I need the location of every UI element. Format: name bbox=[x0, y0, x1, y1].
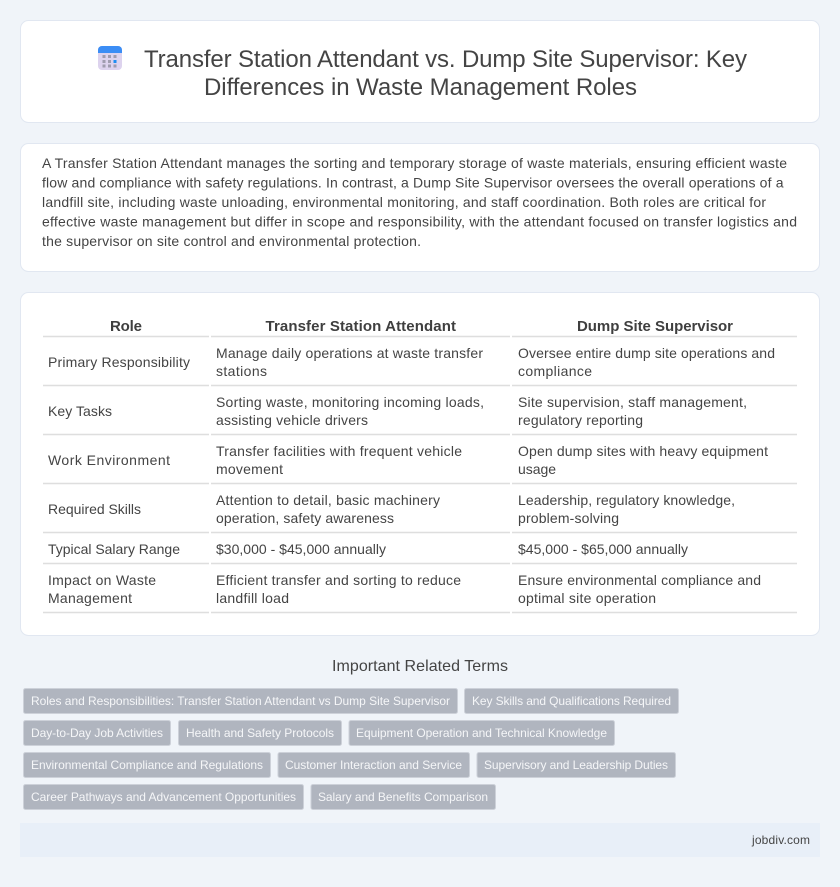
table row: typical salary range: Typical Salary Range bbox=[48, 541, 180, 557]
table row: work environment: movement bbox=[216, 461, 283, 477]
tag: salary and benefits bbox=[311, 784, 496, 810]
table row: impact on waste management: Efficient transfer and sorting to reduce bbox=[216, 572, 461, 588]
table row: required skills: problem-solving bbox=[518, 510, 619, 526]
title: Transfer Station Attendant vs. Dump Site Supervisor: Key bbox=[144, 46, 747, 73]
table row: required skills: Required Skills bbox=[48, 501, 141, 517]
title bbox=[144, 46, 747, 101]
table header row: Dump Site Supervisor bbox=[577, 318, 733, 335]
table row: required skills bbox=[43, 492, 797, 532]
table row: impact on waste management: Management bbox=[48, 590, 132, 606]
text block: description: flow and compliance with safety regulations. In contrast, a Dump Site Supervisor oversees the overall operations of a bbox=[42, 174, 784, 190]
table header row bbox=[43, 318, 797, 336]
tag: roles and responsibilities bbox=[24, 688, 458, 714]
table row: impact on waste management bbox=[43, 572, 797, 612]
tag: equipment operation bbox=[349, 720, 614, 746]
table row: key tasks: Key Tasks bbox=[48, 403, 112, 419]
tag: key skills: Key Skills and Qualifications Required bbox=[472, 694, 671, 708]
tag list: related terms bbox=[24, 688, 678, 810]
table row: key tasks: Site supervision, staff management, bbox=[518, 394, 747, 410]
table row: primary responsibility: Primary Responsibility bbox=[48, 354, 190, 370]
text block: description: effective waste management but differ in scope and responsibility, with the attendant focused on transfer logistics and bbox=[42, 214, 797, 230]
text block: description: A Transfer Station Attendant manages the sorting and temporary storage of waste materials, ensuring efficient waste bbox=[42, 155, 787, 171]
table row: work environment: usage bbox=[518, 461, 556, 477]
panel: header bbox=[20, 20, 820, 122]
tag: roles and responsibilities: Roles and Responsibilities: Transfer Station Attendant vs Dump Site Supervisor bbox=[31, 694, 450, 708]
table row: typical salary range bbox=[43, 541, 797, 564]
tag: health and safety: Health and Safety Protocols bbox=[186, 726, 334, 740]
text block: description bbox=[42, 155, 797, 249]
table row: required skills: operation, safety awareness bbox=[216, 510, 394, 526]
table row: primary responsibility: Manage daily operations at waste transfer bbox=[216, 345, 483, 361]
table row: primary responsibility: compliance bbox=[518, 363, 592, 379]
tag: salary and benefits: Salary and Benefits Comparison bbox=[318, 790, 488, 804]
tag: environmental compliance bbox=[24, 752, 270, 778]
panel: comparison table bbox=[20, 292, 820, 636]
table row: key tasks bbox=[43, 394, 797, 434]
tag: day-to-day activities: Day-to-Day Job Activities bbox=[31, 726, 163, 740]
tag: career pathways bbox=[24, 784, 304, 810]
table row: primary responsibility: Oversee entire dump site operations and bbox=[518, 345, 775, 361]
table row: primary responsibility: stations bbox=[216, 363, 267, 379]
table row: work environment: Transfer facilities with frequent vehicle bbox=[216, 443, 462, 459]
table row: impact on waste management: optimal site operation bbox=[518, 590, 656, 606]
table row: required skills: Leadership, regulatory knowledge, bbox=[518, 492, 735, 508]
table row: work environment: Open dump sites with heavy equipment bbox=[518, 443, 768, 459]
tag: equipment operation: Equipment Operation and Technical Knowledge bbox=[356, 726, 607, 740]
table row: work environment bbox=[43, 443, 797, 484]
tag: supervisory duties bbox=[477, 752, 676, 778]
table row: typical salary range: $30,000 - $45,000 annually bbox=[216, 541, 386, 557]
table row: required skills: Attention to detail, basic machinery bbox=[216, 492, 440, 508]
table row: key tasks: regulatory reporting bbox=[518, 412, 643, 428]
table row: key tasks: assisting vehicle drivers bbox=[216, 412, 368, 428]
table header row: Transfer Station Attendant bbox=[266, 318, 456, 335]
heading: important related terms: Important Related Terms bbox=[332, 658, 508, 675]
table row: impact on waste management: landfill load bbox=[216, 590, 289, 606]
table row: key tasks: Sorting waste, monitoring incoming loads, bbox=[216, 394, 484, 410]
icon: calendar bbox=[98, 46, 122, 70]
table row: typical salary range: $45,000 - $65,000 annually bbox=[518, 541, 688, 557]
panel: description bbox=[20, 144, 820, 272]
tag: key skills bbox=[464, 688, 678, 714]
footer bar bbox=[20, 823, 820, 857]
tag: day-to-day activities bbox=[24, 720, 170, 746]
title: Differences in Waste Management Roles bbox=[204, 74, 637, 101]
table row: impact on waste management: Impact on Waste bbox=[48, 572, 156, 588]
tag: customer interaction: Customer Interaction and Service bbox=[285, 758, 462, 772]
tag: career pathways: Career Pathways and Advancement Opportunities bbox=[31, 790, 296, 804]
table header row: Role bbox=[110, 318, 142, 335]
table row: primary responsibility bbox=[43, 345, 797, 386]
text block: description: landfill site, including waste unloading, environmental monitoring, and staff coordination. Both roles are critical for bbox=[42, 194, 766, 210]
table row: impact on waste management: Ensure environmental compliance and bbox=[518, 572, 761, 588]
tag: customer interaction bbox=[278, 752, 470, 778]
table row: work environment: Work Environment bbox=[48, 452, 170, 468]
tag: environmental compliance: Environmental Compliance and Regulations bbox=[31, 758, 263, 772]
footer source label: jobdiv.com bbox=[751, 833, 810, 847]
tag: health and safety bbox=[178, 720, 342, 746]
tag: supervisory duties: Supervisory and Leadership Duties bbox=[484, 758, 668, 772]
text block: description: the supervisor on site control and environmental protection. bbox=[42, 233, 421, 249]
